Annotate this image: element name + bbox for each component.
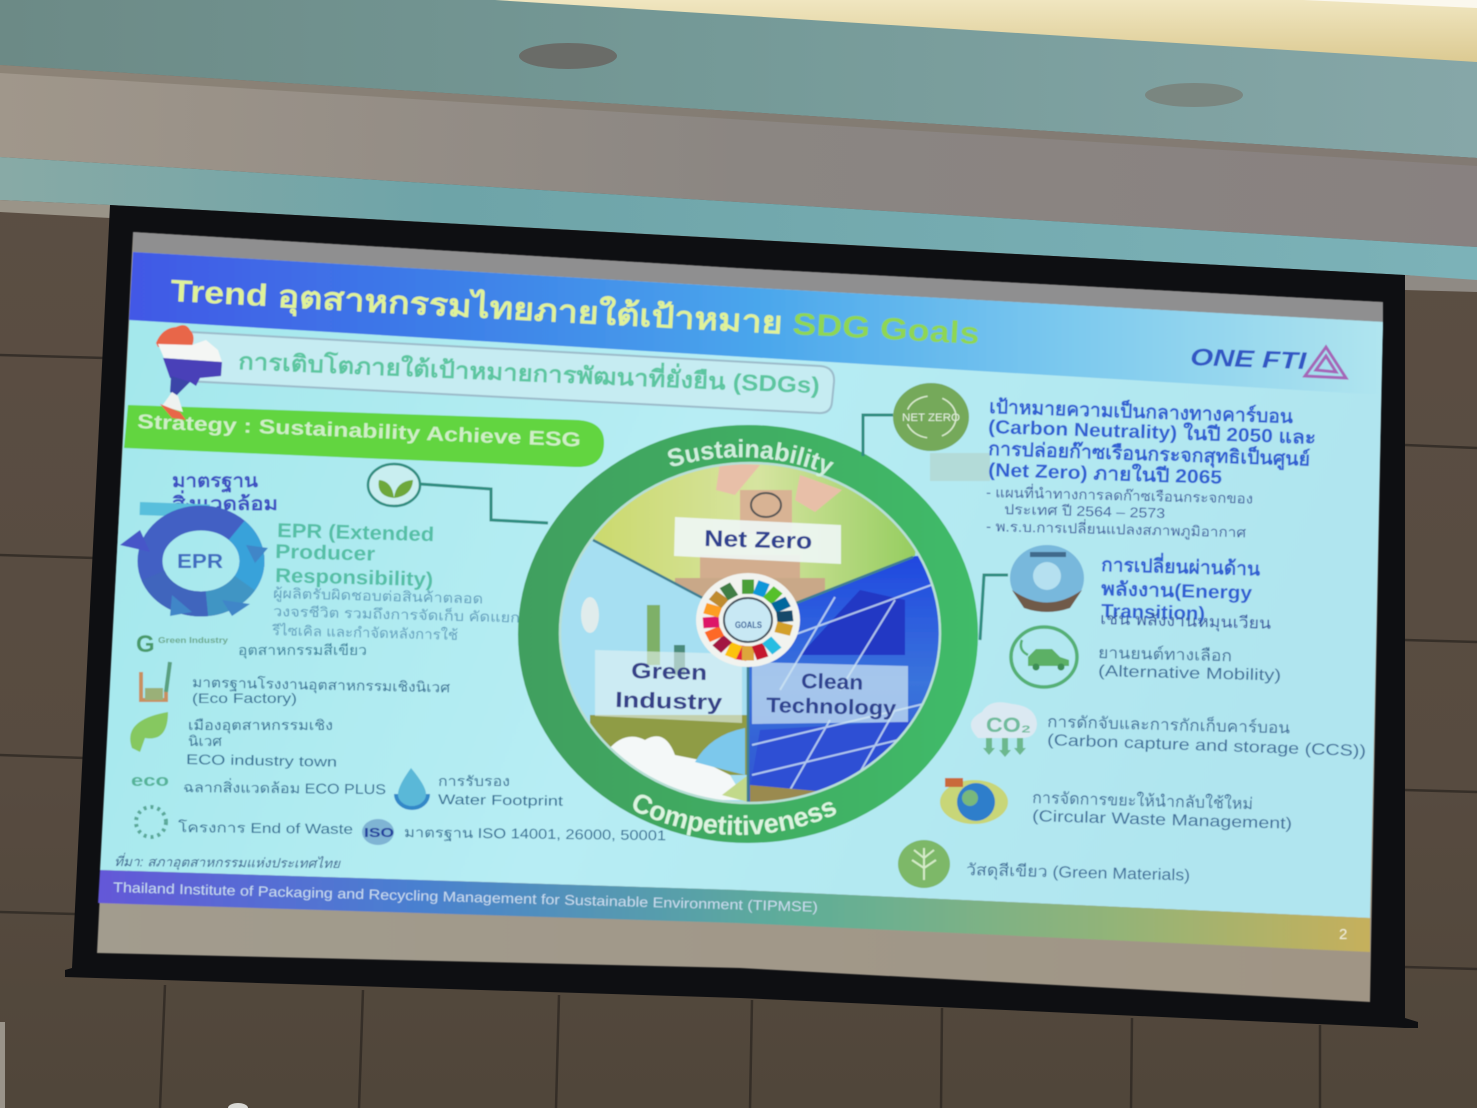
list: eco factory: (Eco Factory) [192, 690, 297, 706]
carbon capture and storage: CO₂ [986, 714, 1031, 737]
source note: ที่มา: สภาอุตสาหกรรมแห่งประเทศไทย [114, 852, 342, 872]
SDG goals medallion [696, 573, 800, 667]
list: eco industry town: ECO industry town [186, 751, 337, 770]
projector screen frame [65, 205, 1418, 1028]
EPR description: ผู้ผลิตรับผิดชอบต่อสินค้าตลอด [273, 585, 483, 607]
net zero goal with icon: การปล่อยก๊าซเรือนกระจกสุทธิเป็นศูนย์ [988, 436, 1310, 472]
list: water footprint: การรับรอง [438, 773, 510, 789]
net zero goal with icon [863, 383, 1316, 541]
footer band: Thailand Institute of Packaging and Recycling Management for Sustainable Environment (TIPMSE) [113, 879, 818, 915]
ring label: sustainability: Sustainability [667, 438, 834, 478]
list: end of waste: โครงการ End of Waste [178, 819, 353, 837]
carbon capture and storage: (Carbon capture and storage (CCS)) [1047, 732, 1366, 760]
net zero goal with icon: (Carbon Neutrality) ในปี 2050 และ [988, 415, 1316, 449]
logo: ONE FTI: ONE FTI [1190, 344, 1308, 375]
EPR description: Producer [275, 541, 376, 566]
green materials [898, 840, 1190, 888]
list: eco industry town: เมืองอุตสาหกรรมเชิง [188, 717, 333, 734]
list: ISO standards: มาตรฐาน ISO 14001, 26000, 50001 [404, 824, 666, 844]
list: end of waste [136, 807, 353, 837]
list: water footprint [396, 768, 563, 809]
wheel slices [560, 464, 940, 802]
heading: environmental standards [172, 471, 278, 515]
label: net zero [674, 517, 841, 564]
footer band: 2 [1339, 926, 1347, 943]
list: green industry: อุตสาหกรรมสีเขียว [238, 642, 367, 659]
subtitle pill: การเติบโตภายใต้เป้าหมายการพัฒนาที่ยั่งยืน (SDGs) [238, 344, 821, 398]
net zero goal with icon: NET ZERO [902, 412, 960, 424]
label: net zero: Net Zero [704, 525, 813, 554]
label: clean technology: Clean [801, 670, 863, 695]
green materials: วัสดุสีเขียว (Green Materials) [966, 861, 1190, 885]
footer band [98, 870, 1370, 952]
EPR description: รีไซเคิล และกำจัดหลังการใช้ [271, 622, 458, 643]
list: eco plus label: eco [131, 771, 169, 790]
alternative mobility [1011, 627, 1281, 687]
icon: EPR cycle [120, 502, 268, 616]
projected slide [96, 231, 1384, 1003]
heading: environmental standards: สิ่งแวดล้อม [172, 490, 278, 515]
icon: EPR cycle: EPR [177, 551, 224, 573]
list: ISO standards [362, 819, 666, 845]
logo: ONE FTI [1190, 344, 1346, 378]
green ring [518, 425, 978, 843]
list: ISO standards: ISO [364, 825, 394, 840]
label: clean technology [752, 662, 908, 724]
energy transition: พลังงาน(Energy [1101, 579, 1253, 604]
circular waste management: การจัดการขยะให้นำกลับใช้ใหม่ [1032, 788, 1253, 813]
SDG goals medallion: GOALS [735, 620, 762, 630]
strategy banner: Strategy : Sustainability Achieve ESG [137, 411, 581, 452]
alternative mobility: ยานยนต์ทางเลือก [1098, 643, 1232, 665]
list: eco industry town [130, 712, 337, 770]
list: green industry: Green Industry [158, 636, 229, 645]
net zero goal with icon: - พ.ร.บ.การเปลี่ยนแปลงสภาพภูมิอากาศ [986, 517, 1246, 541]
list: eco plus label [131, 771, 386, 797]
net zero goal with icon: เป้าหมายความเป็นกลางทางคาร์บอน [989, 394, 1293, 428]
list: eco industry town: นิเวศ [188, 733, 222, 749]
label: clean technology: Technology [766, 694, 897, 720]
carbon capture and storage [971, 702, 1366, 760]
energy transition: การเปลี่ยนผ่านด้าน [1101, 551, 1261, 580]
central wheel [518, 424, 979, 844]
circular waste management [940, 778, 1292, 833]
label: green industry: Green [631, 658, 707, 685]
carbon capture and storage: การดักจับและการกักเก็บคาร์บอน [1047, 711, 1290, 737]
strategy banner [124, 405, 604, 467]
net zero goal with icon: (Net Zero) ภายในปี 2065 [988, 458, 1223, 489]
slide title: Trend อุตสาหกรรมไทยภายใต้เป้าหมาย SDG Goals [170, 272, 980, 353]
EPR description: EPR (Extended [277, 520, 434, 546]
subtitle pill [185, 332, 834, 413]
leaf icon with connector [368, 464, 548, 523]
circular waste management: (Circular Waste Management) [1032, 808, 1292, 833]
list: water footprint: Water Footprint [438, 791, 563, 809]
heading: environmental standards: มาตรฐาน [172, 471, 258, 494]
list: eco plus label: ฉลากสิ่งแวดล้อม ECO PLUS [183, 778, 386, 797]
slice: net zero [592, 464, 916, 602]
net zero goal with icon: ประเทศ ปี 2564 – 2573 [1004, 501, 1165, 521]
list: eco factory [141, 662, 450, 706]
energy transition [980, 545, 1271, 640]
slice: green industry [580, 584, 748, 802]
icon: Thailand flag map [156, 325, 222, 420]
EPR description [271, 520, 520, 643]
alternative mobility: (Alternative Mobility) [1098, 663, 1281, 684]
label: green industry: Industry [615, 687, 723, 715]
title band [129, 252, 1383, 395]
label: green industry [595, 650, 742, 723]
list: eco factory: มาตรฐานโรงงานอุตสาหกรรมเชิงนิเวศ [192, 674, 450, 696]
net zero goal with icon: - แผนที่นำทางการลดก๊าซเรือนกระจกของ [986, 483, 1253, 507]
slice: clean technology [748, 555, 950, 810]
EPR description: วงจรชีวิต รวมถึงการจัดเก็บ คัดแยก [273, 602, 520, 625]
list: green industry: G [136, 631, 155, 658]
ring label: competitiveness: Competitiveness [632, 794, 837, 836]
energy transition: เช่น พลังงานหมุนเวียน [1100, 610, 1271, 634]
energy transition: Transition) [1101, 601, 1205, 625]
EPR description: Responsibility) [275, 565, 433, 591]
list: green industry [136, 631, 367, 659]
